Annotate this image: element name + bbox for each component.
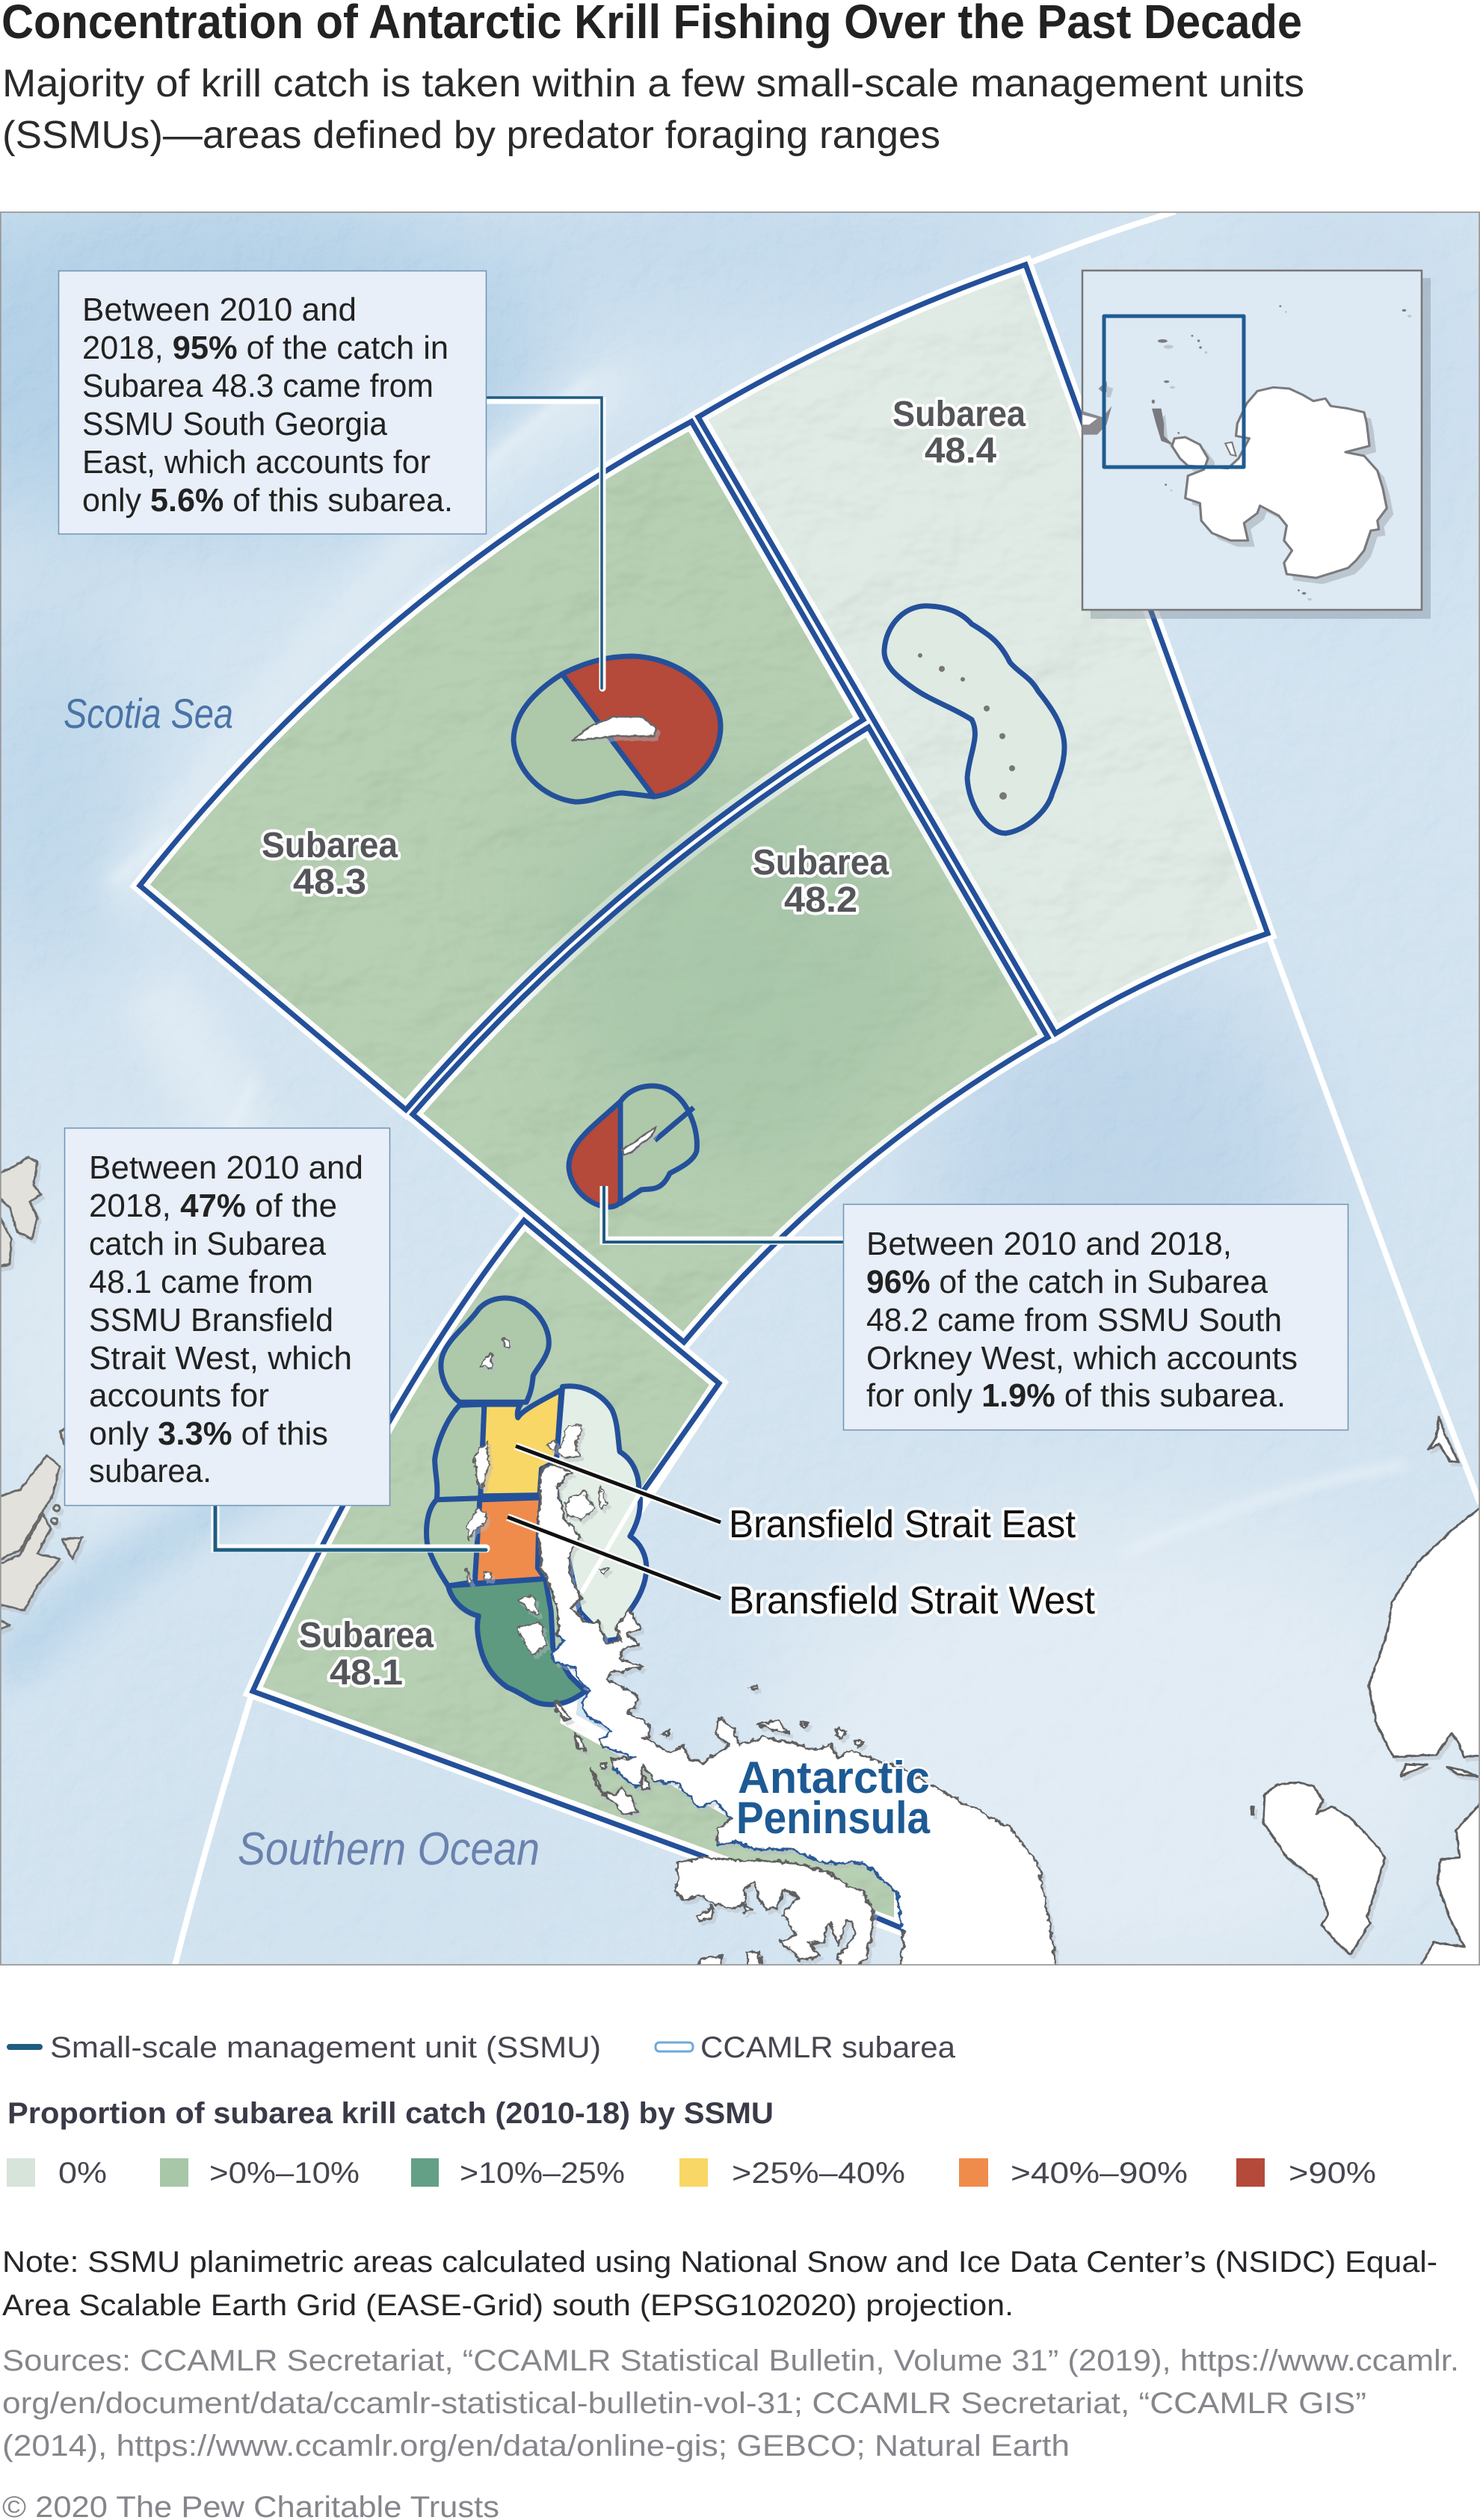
legend heading: Proportion of subarea krill catch (2010-18) by SSMU — [7, 2097, 774, 2130]
callout: subarea 48.3: 2018, 95% of the catch in — [82, 330, 448, 366]
callout: subarea 48.3 — [58, 271, 486, 534]
callout: subarea 48.1: Between 2010 and — [89, 1149, 363, 1186]
subarea 48.1 — [253, 1220, 901, 1928]
panel: map — [0, 149, 1480, 1995]
legend: catch proportion classes: >0%–10% — [209, 2157, 360, 2190]
callout: subarea 48.1: 48.1 came from — [89, 1264, 313, 1300]
legend: catch proportion classes: >40%–90% — [1011, 2157, 1188, 2190]
seabed ridge highlights — [112, 381, 1405, 1554]
label: Subarea 48.2 — [753, 843, 889, 920]
sources: Sources: CCAMLR Secretariat, “CCAMLR Statistical Bulletin, Volume 31” (2019), https://www.ccamlr. — [2, 2344, 1459, 2377]
note: Note: SSMU planimetric areas calculated using National Snow and Ice Data Center’s (NSIDC) Equal- — [2, 2246, 1437, 2279]
callout: subarea 48.3: only 5.6% of this subarea. — [82, 482, 453, 519]
label: Bransfield Strait West: Bransfield Strait West — [729, 1579, 1096, 1622]
SSMU East 0% — [551, 1386, 647, 1640]
sources: (2014), https://www.ccamlr.org/en/data/online-gis; GEBCO; Natural Earth — [2, 2430, 1070, 2462]
land: small islands — [555, 1685, 863, 1971]
islands: South Shetlands and nearby — [466, 1338, 609, 1655]
legend: catch proportion classes: 0% — [58, 2157, 107, 2190]
small islands — [1152, 305, 1406, 595]
callout: subarea 48.1: subarea. — [89, 1453, 212, 1489]
label: Subarea 48.4: Subarea — [892, 395, 1026, 434]
SSMU Drake Passage East — [427, 1498, 481, 1586]
white outer boundary lines — [175, 211, 1480, 1965]
legend swatch: SSMU line — [7, 2044, 43, 2050]
land: lower peninsula — [0, 1455, 60, 1561]
callout: subarea 48.1: only 3.3% of this — [89, 1415, 328, 1452]
callout: subarea 48.2: 96% of the catch in Subarea — [866, 1264, 1268, 1300]
SSMU Bransfield Strait East — [481, 1390, 561, 1496]
label: Antarctic Peninsula: Peninsula — [736, 1793, 931, 1843]
legend: line types: Small-scale management unit (SSMU) — [50, 2031, 601, 2064]
label: Subarea 48.1: 48.1 — [330, 1653, 403, 1693]
label: Bransfield Strait East: Bransfield Strait East — [729, 1503, 1076, 1546]
subarea 48.4 — [698, 265, 1268, 1034]
label: Subarea 48.2: 48.2 — [784, 880, 857, 920]
legend swatch: CCAMLR subarea line — [656, 2042, 693, 2051]
Antarctica shadow — [1160, 394, 1393, 584]
SSMU South Georgia West — [514, 674, 654, 802]
label: Subarea 48.1: Subarea — [299, 1616, 434, 1655]
label: Subarea 48.4 — [892, 395, 1026, 471]
island: South Georgia — [573, 717, 656, 741]
Antarctic Peninsula tip — [1152, 409, 1174, 446]
callout: subarea 48.2: Orkney West, which accounts — [866, 1340, 1298, 1377]
subtitle: Majority of krill catch is taken within a few small-scale management units — [2, 62, 1304, 105]
leader line: Bransfield Strait East — [516, 1446, 721, 1522]
SSMUs Antarctic Peninsula — [427, 1298, 647, 1705]
subarea outlines — [140, 265, 1268, 1928]
SSMU South Georgia East — [562, 656, 721, 797]
callout: subarea 48.1: 2018, 47% of the — [89, 1188, 337, 1224]
callout: subarea 48.1: SSMU Bransfield — [89, 1302, 333, 1338]
land: Alexander Island — [676, 1858, 873, 1971]
legend: catch proportion classes: >90% — [1289, 2157, 1376, 2190]
coast line: subarea boundary along peninsula — [551, 1637, 902, 1930]
land: upper island group — [0, 1157, 41, 1239]
SSMU Elephant Island — [441, 1298, 549, 1402]
callout: subarea 48.1: accounts for — [89, 1377, 269, 1414]
callout: subarea 48.1: catch in Subarea — [89, 1226, 327, 1262]
land: Antarctic Peninsula region — [538, 1464, 1057, 1971]
land: eastern ice shelf — [1369, 1504, 1480, 1757]
South America tip — [1082, 406, 1111, 435]
note — [2, 2246, 1437, 2322]
Antarctica — [1172, 387, 1387, 578]
label: Antarctic Peninsula — [736, 1752, 931, 1843]
legend: catch proportion classes — [7, 2157, 1376, 2190]
callout: subarea 48.2: for only 1.9% of this subarea. — [866, 1377, 1286, 1414]
label: Subarea 48.3: Subarea — [262, 826, 398, 865]
note: Area Scalable Earth Grid (EASE-Grid) south (EPSG102020) projection. — [2, 2289, 1014, 2322]
label: Subarea 48.3: 48.3 — [293, 862, 366, 902]
SSMU South Orkney West — [569, 1102, 620, 1207]
callout: subarea 48.2: 48.2 came from SSMU South — [866, 1302, 1282, 1338]
legend: catch proportion classes: >25%–40% — [732, 2157, 905, 2190]
land: Berkner Island — [1263, 1782, 1385, 1954]
land: Antarctic Peninsula — [538, 1464, 1057, 1971]
inset extent box — [1104, 316, 1244, 467]
Alexander Island — [1225, 442, 1236, 456]
land: South America west — [0, 1157, 82, 1631]
SSMU Drake Passage West — [435, 1404, 484, 1500]
legend: line types: CCAMLR subarea — [700, 2031, 956, 2064]
callout: subarea 48.2 — [843, 1205, 1348, 1430]
ocean background — [0, 149, 1480, 1995]
map frame — [0, 212, 1480, 1965]
leader line: South Georgia East — [486, 398, 602, 688]
callout: subarea 48.3: Between 2010 and — [82, 291, 357, 328]
SSMU South Orkney East — [620, 1086, 697, 1203]
callout: subarea 48.3: SSMU South Georgia — [82, 406, 388, 442]
sources: org/en/document/data/ccamlr-statistical-bulletin-vol-31; CCAMLR Secretariat, “CCAMLR GIS” — [2, 2387, 1366, 2420]
label: Subarea 48.2: Subarea — [753, 843, 889, 883]
SSMU South Orkney — [569, 1086, 697, 1207]
sources — [2, 2344, 1459, 2462]
land: Weddell Sea coasts — [1251, 1416, 1480, 1973]
subarea relief texture — [0, 211, 1480, 1965]
callout: subarea 48.3: Subarea 48.3 came from — [82, 368, 434, 404]
label: Subarea 48.1 — [299, 1616, 434, 1693]
SSMU South Georgia — [514, 656, 721, 802]
map relief texture — [0, 211, 1480, 1965]
label: Subarea 48.4: 48.4 — [925, 431, 996, 471]
label: Southern Ocean: Southern Ocean — [238, 1823, 540, 1875]
subtitle — [2, 62, 1304, 157]
land: southeast coast — [1417, 1804, 1480, 1973]
leader line: Bransfield Strait West — [508, 1517, 721, 1599]
callout: subarea 48.1: Strait West, which — [89, 1340, 352, 1377]
inset locator map — [1082, 271, 1431, 619]
legend: catch proportion classes: >10%–25% — [460, 2157, 625, 2190]
label: Antarctic Peninsula: Antarctic — [738, 1752, 930, 1803]
SSMU Gerlache — [448, 1579, 585, 1705]
island: South Orkney — [622, 1127, 656, 1155]
leader line: South Orkney West — [604, 1186, 843, 1242]
subarea 48.3 — [140, 421, 863, 1110]
subtitle: (SSMUs)—areas defined by predator foraging ranges — [2, 114, 940, 157]
callout: subarea 48.3: East, which accounts for — [82, 444, 431, 481]
callout: subarea 48.2: Between 2010 and 2018, — [866, 1226, 1232, 1262]
legend: line types — [7, 2031, 956, 2064]
SSMU South Sandwich Islands — [884, 606, 1064, 833]
leader line: Bransfield Strait West catch — [215, 1506, 486, 1550]
subarea 48.2 — [413, 727, 1048, 1342]
callout: subarea 48.1 — [64, 1128, 390, 1505]
land: small Weddell islands — [1401, 1764, 1428, 1776]
label: Scotia Sea: Scotia Sea — [64, 690, 233, 737]
label: Subarea 48.3 — [262, 826, 398, 902]
SSMU Bransfield Strait West — [475, 1498, 546, 1584]
